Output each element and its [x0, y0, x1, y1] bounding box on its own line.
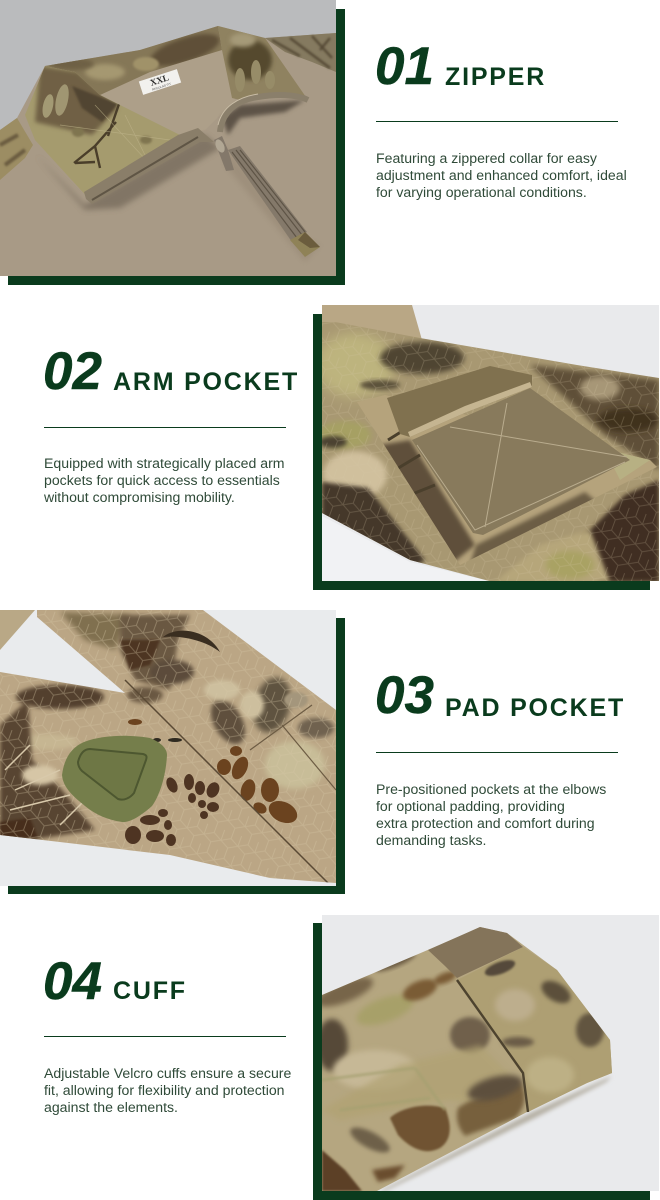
photo: arm pocket [322, 305, 659, 581]
panel: arm pocket feature [43, 305, 659, 590]
zipper end patch [290, 232, 320, 257]
photo: elbow pad pocket [0, 610, 336, 886]
camo fabric [0, 610, 336, 883]
body text [44, 455, 285, 505]
body text: Adjustable Velcro cuffs ensure a secure [44, 1065, 291, 1081]
body text: extra protection and comfort during [376, 815, 595, 831]
tan sleeve corner [0, 610, 35, 650]
heading: cuff: CUFF [113, 977, 187, 1005]
body text: Featuring a zippered collar for easy [376, 150, 597, 166]
pocket flap [387, 366, 532, 437]
green photo frame [8, 9, 345, 285]
brown scale spots [125, 774, 222, 846]
number 01: 01 [375, 37, 434, 96]
heading: pad pocket: PAD POCKET [445, 694, 625, 722]
collar zipper tape, right [220, 95, 308, 132]
green photo frame [313, 314, 650, 590]
tan sleeve [322, 305, 422, 340]
body text: without compromising mobility. [44, 489, 235, 505]
green photo frame [8, 618, 345, 894]
velcro panel [412, 388, 630, 535]
brown patches [390, 1106, 450, 1151]
green photo frame [313, 923, 650, 1200]
body text: demanding tasks. [376, 832, 486, 848]
cross stitching [417, 403, 627, 530]
pocket backing panel [357, 395, 657, 565]
shoulder right panel [265, 33, 336, 72]
size label [139, 69, 181, 95]
velcro tab [428, 927, 523, 978]
elbow pad patch [62, 736, 167, 822]
heading: zipper: ZIPPER [445, 63, 546, 91]
camo fabric [322, 322, 659, 582]
divider rule [376, 752, 618, 753]
forearm slit [163, 631, 220, 652]
divider rule [44, 1036, 286, 1037]
sleeve seams [125, 680, 330, 885]
body text [376, 781, 606, 848]
back collar band [45, 26, 222, 95]
size label: XXL [149, 72, 170, 88]
right collar [218, 26, 308, 100]
body text: for optional padding, providing [376, 798, 565, 814]
number 04: 04 [43, 952, 102, 1011]
body text: Equipped with strategically placed arm [44, 455, 285, 471]
cuff shadow [380, 1076, 612, 1191]
shadows [36, 135, 220, 210]
photo: velcro cuff [322, 915, 659, 1191]
divider rule [376, 121, 618, 122]
divider rule [44, 427, 286, 428]
left collar flap [25, 66, 180, 200]
body text: for varying operational conditions. [376, 184, 587, 200]
body text: Pre-positioned pockets at the elbows [376, 781, 606, 797]
panel: zipper feature [0, 0, 627, 285]
collar zipper tape, left [84, 128, 214, 204]
panel: pad pocket feature [0, 610, 625, 894]
body text: fit, allowing for flexibility and protection [44, 1082, 284, 1098]
shoulder left panel [0, 118, 33, 180]
body text [376, 150, 627, 200]
number 03: 03 [375, 666, 434, 725]
inner neck [100, 50, 235, 135]
camo sleeve [322, 927, 612, 1191]
number 02: 02 [43, 342, 102, 401]
size label: REGULAR FIT [151, 82, 172, 92]
velcro strap [457, 947, 612, 1112]
body text: pockets for quick access to essentials [44, 472, 280, 488]
body text: against the elements. [44, 1099, 178, 1115]
zipper teeth and slider [228, 146, 307, 242]
shirt body [0, 26, 336, 276]
body text: adjustment and enhanced comfort, ideal [376, 167, 627, 183]
photo: zippered collar [0, 0, 336, 276]
heading: arm pocket: ARM POCKET [113, 368, 299, 396]
body text [44, 1065, 291, 1115]
strap edge [457, 980, 528, 1112]
panel: cuff feature [43, 915, 659, 1200]
